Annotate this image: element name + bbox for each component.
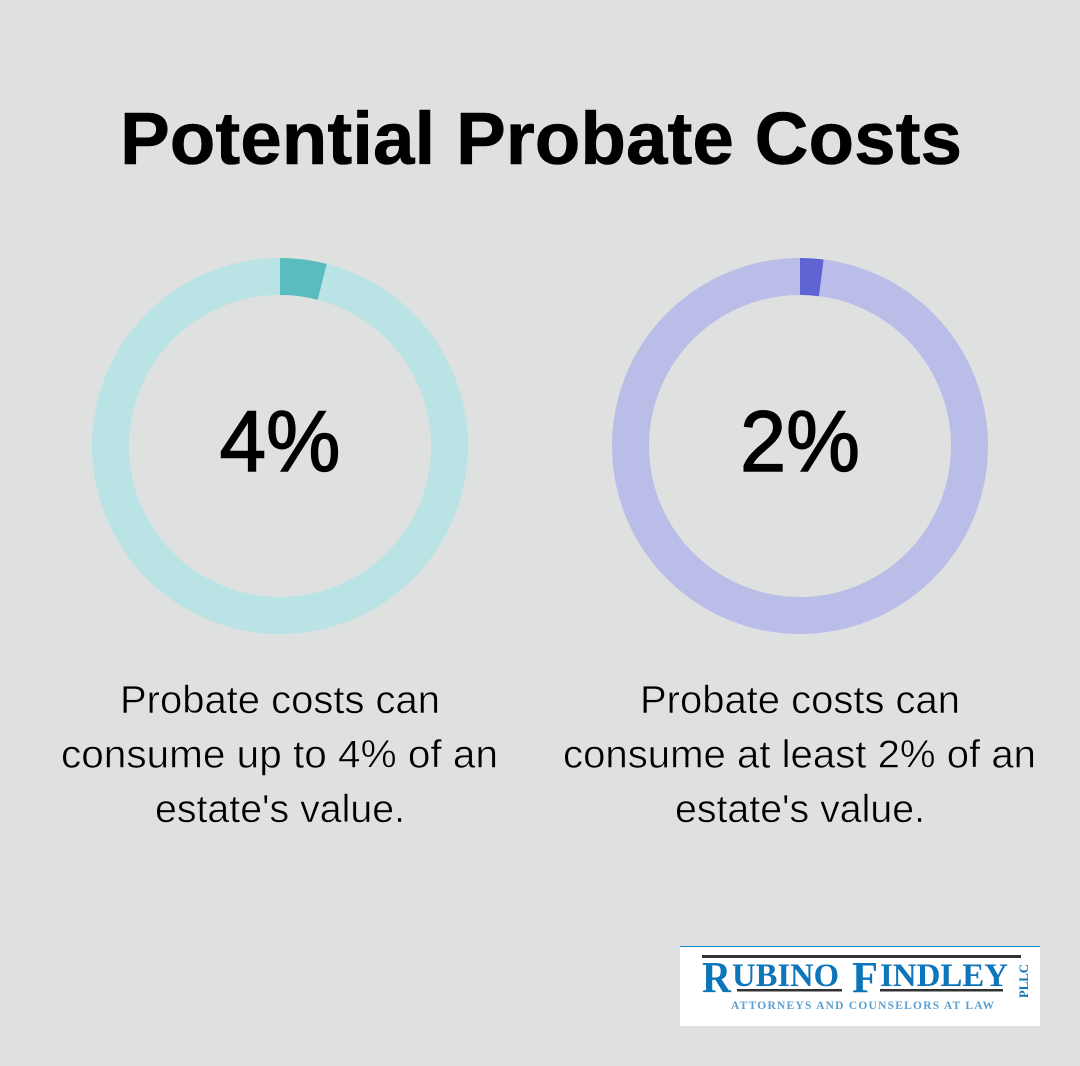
logo: Rubino Findley PLLC: UBINO xyxy=(732,958,839,994)
description: 4%: estate's value. xyxy=(155,788,405,831)
logo: Rubino Findley PLLC: INDLEY xyxy=(880,958,1008,994)
donut chart: 2% xyxy=(630,258,970,616)
description: 2%: consume at least 2% of an xyxy=(563,734,1036,776)
logo: Rubino Findley PLLC: F xyxy=(852,953,878,1002)
description: 2% xyxy=(563,679,1036,831)
logo: Rubino Findley PLLC: R xyxy=(702,953,732,1002)
panel: 2% stat xyxy=(563,258,1036,831)
description: 4%: consume up to 4% of an xyxy=(61,734,498,776)
title: Potential Probate Costs xyxy=(120,97,962,180)
logo: Rubino Findley PLLC: PLLC xyxy=(1016,964,1031,998)
logo: Rubino Findley PLLC xyxy=(680,946,1040,1026)
description: 2%: Probate costs can xyxy=(640,679,960,722)
value: 4%: 4% xyxy=(220,394,340,490)
logo: Rubino Findley PLLC: ATTORNEYS AND COUNSELORS AT LAW xyxy=(731,1000,994,1012)
value: 2%: 2% xyxy=(740,394,860,490)
description: 2%: estate's value. xyxy=(675,788,925,831)
description: 4%: Probate costs can xyxy=(120,679,440,722)
panel: 4% stat xyxy=(61,258,498,831)
description: 4% xyxy=(61,679,498,831)
donut chart: 4% xyxy=(110,258,450,616)
